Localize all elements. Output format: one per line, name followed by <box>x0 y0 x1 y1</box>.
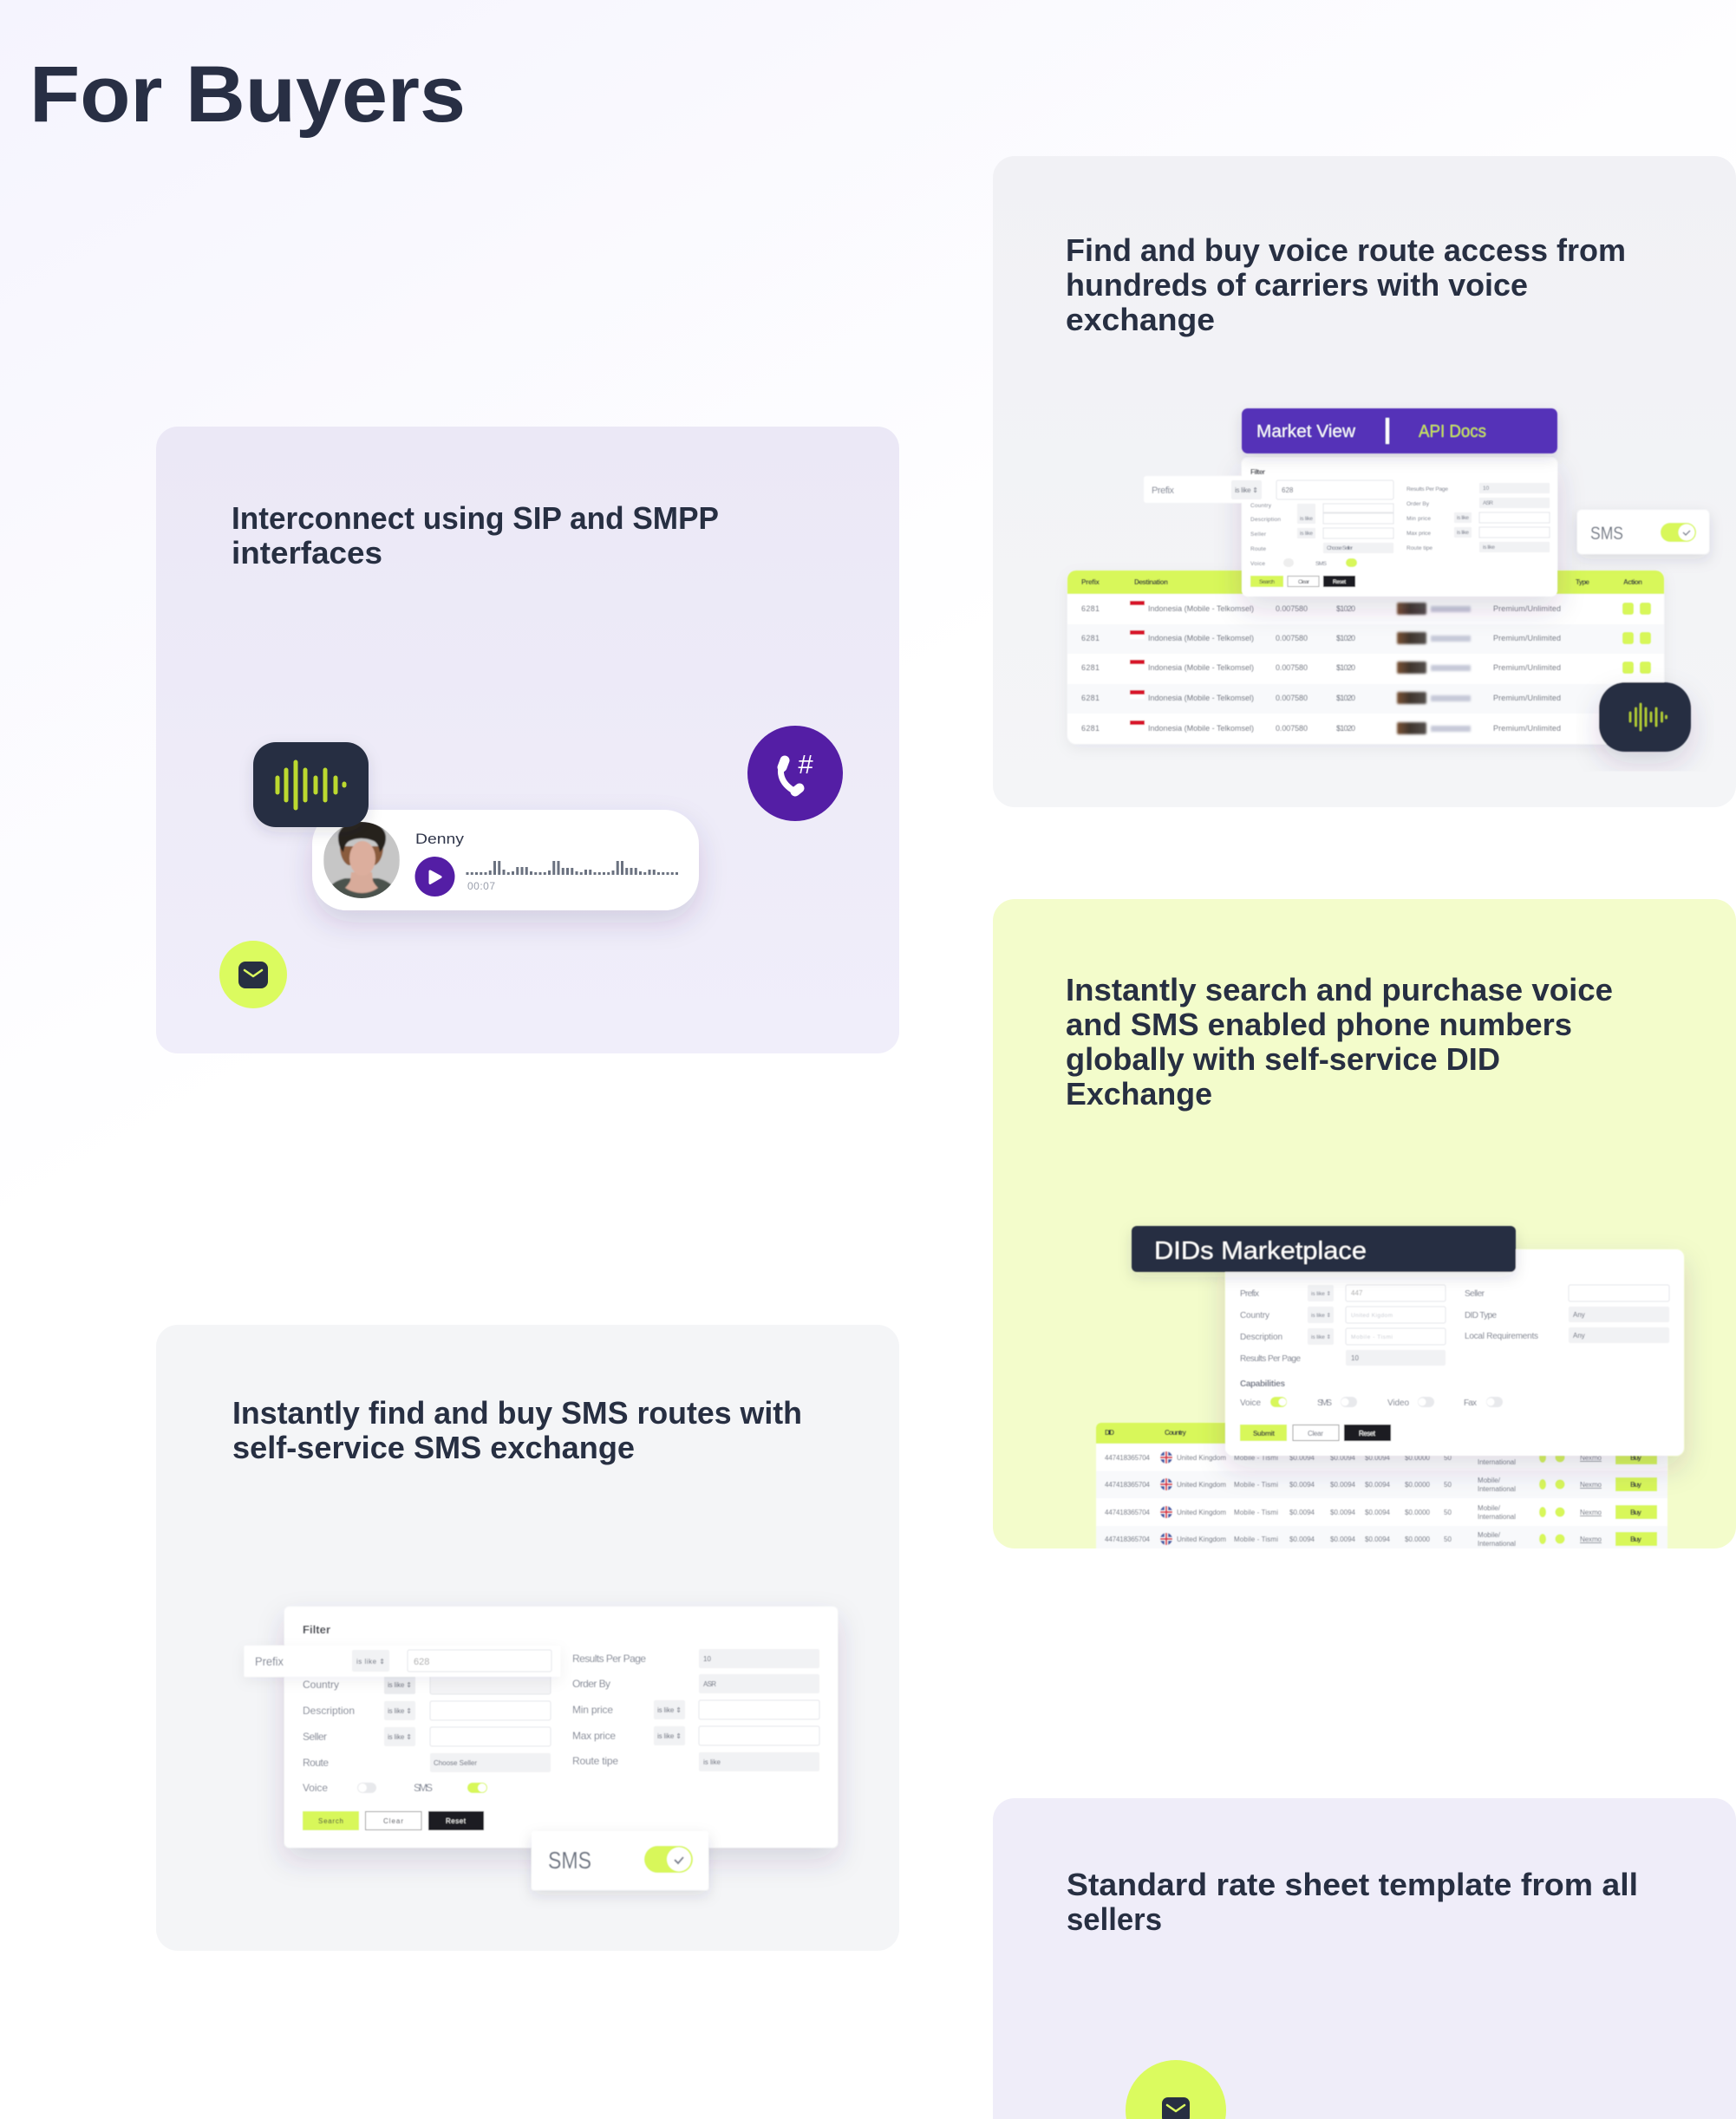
carrier rates table: 6281 <box>1081 694 1100 702</box>
DIDs marketplace title bar: DIDs Marketplace <box>1154 1237 1367 1265</box>
DID listings table: 50 <box>1444 1509 1452 1516</box>
prefix filter strip <box>1144 476 1400 503</box>
filter form card: Reset <box>1333 579 1346 585</box>
DID search form card: DID Type <box>1465 1311 1497 1320</box>
DID search form card: Local Requirements <box>1465 1332 1538 1341</box>
carrier rates table: Premium/Unlimited <box>1493 634 1561 642</box>
filter form card: Seller <box>1250 531 1267 538</box>
heading: interconnect: interfaces <box>232 535 382 570</box>
SMS toggle card <box>1577 510 1709 554</box>
DID listings table: United Kingdom <box>1177 1535 1226 1543</box>
DID search form card: Submit <box>1253 1430 1275 1438</box>
heading: rate sheet template: Standard rate sheet template from all <box>1067 1867 1638 1902</box>
panel: SMS exchange <box>156 1325 899 1951</box>
SMS toggle card: SMS <box>548 1847 591 1874</box>
filter form card: Order By <box>1406 501 1430 507</box>
market view mockup <box>1067 408 1709 752</box>
heading: DID exchange: Instantly search and purchase voice <box>1066 972 1613 1007</box>
DID listings table: Mobile - Tismi <box>1234 1481 1278 1489</box>
carrier rates table: Premium/Unlimited <box>1493 724 1561 733</box>
SMS toggle card <box>532 1831 708 1890</box>
filter form card: Search <box>1259 579 1275 585</box>
prefix filter strip: 628 <box>1282 486 1294 494</box>
DID listings table: Nexmo <box>1580 1481 1602 1489</box>
carrier rates table: $1020 <box>1336 634 1355 642</box>
DID listings table: 50 <box>1444 1481 1452 1489</box>
DID listings table: $0.0000 <box>1405 1454 1431 1462</box>
filter form card: 10 <box>1483 486 1490 492</box>
heading: interconnect: Interconnect using SIP and SMPP <box>232 500 719 536</box>
DID listings table: 447418365704 <box>1105 1509 1151 1516</box>
filter form card: Description <box>1250 517 1281 523</box>
icon: mail circle <box>219 941 287 1008</box>
DID listings table: Nexmo <box>1580 1535 1602 1543</box>
carrier rates table: 6281 <box>1081 724 1100 733</box>
DID listings table: International <box>1478 1485 1516 1493</box>
carrier rates table: 0.007580 <box>1276 634 1308 642</box>
market view tab bar: API Docs <box>1419 422 1486 441</box>
DID listings table: $0.0094 <box>1289 1454 1315 1462</box>
carrier rates table: Destination <box>1134 578 1168 586</box>
heading: SMS routes: Instantly find and buy SMS routes with <box>232 1395 802 1431</box>
icon: dark sound wave tile <box>1599 682 1691 752</box>
filter form card: Country <box>303 1679 339 1691</box>
filter form card: ASR <box>1483 500 1493 506</box>
prefix filter strip: Prefix <box>1152 486 1174 496</box>
DID listings table: Buy <box>1630 1509 1642 1516</box>
avatar photo <box>323 821 401 902</box>
filter form card: is like <box>703 1758 721 1766</box>
carrier rates table: Premium/Unlimited <box>1493 604 1561 613</box>
filter form card: Filter <box>303 1623 330 1636</box>
DID listings table: Nexmo <box>1580 1454 1602 1462</box>
filter form card: Results Per Page <box>572 1653 646 1665</box>
DID listings table: 50 <box>1444 1454 1452 1462</box>
carrier rates table: Indonesia (Mobile - Telkomsel) <box>1148 634 1254 642</box>
carrier rates table: 0.007580 <box>1276 604 1308 613</box>
DID listings table: Mobile - Tismi <box>1234 1454 1278 1462</box>
SMS toggle card: SMS <box>1590 524 1623 544</box>
prefix filter strip <box>245 1646 560 1677</box>
filter form card: Filter <box>1250 468 1265 476</box>
DID search form card: Voice <box>1240 1399 1261 1408</box>
filter form card: Search <box>318 1817 343 1825</box>
DID listings table <box>1096 1423 1667 1562</box>
DID listings table: $0.0094 <box>1365 1481 1391 1489</box>
DID search form card: Video <box>1387 1399 1409 1408</box>
filter form card: is like ⇕ <box>657 1706 682 1714</box>
DID listings table: Mobile - Tismi <box>1234 1535 1278 1543</box>
filter form card: Clear <box>1298 579 1310 585</box>
carrier rates table: 0.007580 <box>1276 694 1308 702</box>
DID search form card: SMS <box>1317 1399 1332 1408</box>
DID listings table: Mobile - Tismi <box>1234 1509 1278 1516</box>
DID listings table: $0.0094 <box>1289 1509 1315 1516</box>
DID search form card: 447 <box>1351 1289 1363 1297</box>
carrier rates table: 0.007580 <box>1276 724 1308 733</box>
market view tab bar: Market View <box>1256 422 1356 441</box>
filter form card: Results Per Page <box>1406 486 1448 492</box>
heading: SMS routes: self-service SMS exchange <box>232 1430 635 1465</box>
DID search form card: 10 <box>1351 1354 1359 1362</box>
carrier rates table: $1020 <box>1336 724 1355 733</box>
DID listings table: Mobile/ <box>1478 1477 1501 1484</box>
DID search form card: United Kigdom <box>1351 1313 1393 1319</box>
carrier rates table: Type <box>1576 578 1590 586</box>
carrier rates table: 6281 <box>1081 663 1100 672</box>
filter form card: is like ⇕ <box>388 1733 412 1741</box>
DID listings table: Country <box>1165 1429 1187 1437</box>
filter form card: Route tipe <box>1406 545 1433 551</box>
carrier rates table: 6281 <box>1081 634 1100 642</box>
DID search form card: Any <box>1573 1332 1585 1340</box>
filter form card: Route <box>303 1757 329 1769</box>
carrier rates table: Prefix <box>1081 578 1100 586</box>
filter form card: ASR <box>703 1680 716 1688</box>
DID listings table: $0.0094 <box>1330 1481 1356 1489</box>
DID listings table: Buy <box>1630 1535 1642 1543</box>
panel: voice exchange <box>993 156 1736 807</box>
DID listings table: 447418365704 <box>1105 1454 1151 1462</box>
DID listings table: United Kingdom <box>1177 1454 1226 1462</box>
DID search form card: Country <box>1240 1311 1269 1320</box>
filter form card: is like ⇕ <box>657 1732 682 1740</box>
carrier rates table: Premium/Unlimited <box>1493 663 1561 672</box>
DID search form card: is like ⇕ <box>1311 1290 1331 1297</box>
filter form card: is like <box>1457 515 1469 521</box>
filter form card: Reset <box>446 1817 467 1825</box>
filter form card: Route <box>1250 546 1266 552</box>
DID listings table: $0.0000 <box>1405 1509 1431 1516</box>
filter form card: Route tipe <box>572 1755 618 1767</box>
filter form card: Min price <box>1406 516 1431 522</box>
DID search form card: Prefix <box>1240 1289 1259 1299</box>
DID search form card: is like ⇕ <box>1311 1333 1331 1340</box>
heading: voice route access: hundreds of carriers with voice <box>1066 267 1528 303</box>
DID listings table: International <box>1478 1540 1516 1548</box>
prefix filter strip: Prefix <box>255 1654 284 1668</box>
DID listings table: $0.0094 <box>1330 1454 1356 1462</box>
DID listings table: $0.0094 <box>1289 1481 1315 1489</box>
voice message card <box>312 810 699 910</box>
filter form card: Country <box>1250 503 1272 509</box>
DID search form card: Mobile - Tismi <box>1351 1334 1393 1340</box>
DID search form card: Description <box>1240 1333 1282 1342</box>
carrier rates table <box>1067 570 1664 744</box>
carrier rates table: Premium/Unlimited <box>1493 694 1561 702</box>
filter form card <box>1242 458 1557 597</box>
heading: DID exchange: and SMS enabled phone numbers <box>1066 1007 1572 1042</box>
DID search form card: Capabilities <box>1240 1379 1285 1389</box>
heading: voice route access: Find and buy voice route access from <box>1066 232 1626 268</box>
filter form card: Choose Seller <box>1327 545 1354 551</box>
carrier rates table: Indonesia (Mobile - Telkomsel) <box>1148 694 1254 702</box>
carrier rates table: $1020 <box>1336 663 1355 672</box>
carrier rates table: Action <box>1623 578 1642 586</box>
DID listings table: 447418365704 <box>1105 1481 1151 1489</box>
DID listings table: Buy <box>1630 1454 1642 1462</box>
heading: DID exchange: globally with self-service DID <box>1066 1041 1500 1077</box>
market view tab bar <box>1242 408 1557 453</box>
filter form card: Seller <box>303 1731 327 1743</box>
DIDs marketplace title bar <box>1132 1226 1516 1272</box>
DID listings table: $0.0094 <box>1365 1454 1391 1462</box>
panel: DID exchange <box>993 899 1736 1562</box>
carrier rates table: $1020 <box>1336 694 1355 702</box>
filter form card: Min price <box>572 1704 613 1716</box>
DID search form card: Reset <box>1359 1430 1376 1438</box>
filter form card: Order By <box>572 1678 610 1690</box>
carrier rates table: Indonesia (Mobile - Telkomsel) <box>1148 663 1254 672</box>
DID listings table: $0.0094 <box>1289 1535 1315 1543</box>
heading: voice route access: exchange <box>1066 302 1215 337</box>
DID listings table: $0.0000 <box>1405 1481 1431 1489</box>
play button <box>414 857 454 896</box>
filter form card: is like ⇕ <box>388 1681 412 1689</box>
filter form card: Max price <box>572 1730 616 1742</box>
heading: rate sheet template: sellers <box>1067 1901 1162 1937</box>
DID listings table: International <box>1478 1458 1516 1466</box>
carrier rates table: 6281 <box>1081 604 1100 613</box>
DID listings table: Mobile/ <box>1478 1531 1501 1539</box>
DID search form card: is like ⇕ <box>1311 1312 1331 1319</box>
panel: rate sheets <box>993 1798 1736 2119</box>
DID listings table: 50 <box>1444 1535 1452 1543</box>
DID listings table: Nexmo <box>1580 1509 1602 1516</box>
filter form card: SMS <box>414 1782 433 1794</box>
duration: 00:07 <box>467 880 495 892</box>
filter form card: Choose Seller <box>434 1759 477 1767</box>
filter form card: Clear <box>383 1817 403 1825</box>
filter form card: is like <box>1300 531 1313 537</box>
carrier rates table: Indonesia (Mobile - Telkomsel) <box>1148 604 1254 613</box>
DID search form card: Clear <box>1308 1430 1323 1438</box>
filter form card: 10 <box>703 1655 711 1663</box>
DID listings table: $0.0094 <box>1330 1509 1356 1516</box>
filter form card: Description <box>303 1705 355 1717</box>
prefix filter strip: is like ⇕ <box>356 1658 385 1666</box>
DID listings table: Buy <box>1630 1481 1642 1489</box>
DID listings table: International <box>1478 1513 1516 1521</box>
DID search form card: Any <box>1573 1311 1585 1319</box>
DID search form card: Fax <box>1464 1399 1477 1408</box>
DID listings table: United Kingdom <box>1177 1481 1226 1489</box>
icon: phone hash: # <box>798 749 813 779</box>
prefix filter strip: is like ⇕ <box>1235 486 1258 494</box>
audio waveform <box>467 861 676 875</box>
DID listings table: $0.0094 <box>1330 1535 1356 1543</box>
panel: SIP and SMPP interfaces <box>156 427 899 1053</box>
carrier rates table: Indonesia (Mobile - Telkomsel) <box>1148 724 1254 733</box>
filter form card: Voice <box>1250 561 1265 567</box>
heading: DID exchange: Exchange <box>1066 1076 1212 1112</box>
filter form card: Max price <box>1406 531 1431 537</box>
DID search form card <box>1225 1249 1684 1456</box>
filter form card: is like <box>1483 544 1495 551</box>
DID listings table: Mobile/ <box>1478 1504 1501 1512</box>
DID listings table: 447418365704 <box>1105 1535 1151 1543</box>
filter form card: is like <box>1457 530 1469 536</box>
title: For Buyers <box>29 50 466 139</box>
DID search form card: Seller <box>1465 1289 1485 1299</box>
DID search form card: Results Per Page <box>1240 1354 1301 1364</box>
carrier rates table: $1020 <box>1336 604 1355 613</box>
icon: dark sound wave tile <box>253 742 369 827</box>
name: Denny <box>415 831 465 847</box>
DID listings table: DID <box>1105 1429 1114 1437</box>
DID listings table: $0.0094 <box>1365 1509 1391 1516</box>
DIDs marketplace mockup <box>1096 1226 1684 1562</box>
filter form card <box>284 1607 838 1848</box>
icon: phone hash <box>747 726 843 821</box>
carrier rates table: 0.007580 <box>1276 663 1308 672</box>
filter form card: is like <box>1300 516 1313 522</box>
DID listings table: $0.0000 <box>1405 1535 1431 1543</box>
SMS filter mockup <box>245 1607 838 1890</box>
filter form card: is like ⇕ <box>388 1707 412 1715</box>
DID listings table: United Kingdom <box>1177 1509 1226 1516</box>
filter form card: Voice <box>303 1782 328 1794</box>
filter form card: SMS <box>1315 561 1328 567</box>
icon: mail circle <box>1126 2060 1226 2119</box>
prefix filter strip: 628 <box>414 1657 429 1667</box>
DID listings table: $0.0094 <box>1365 1535 1391 1543</box>
